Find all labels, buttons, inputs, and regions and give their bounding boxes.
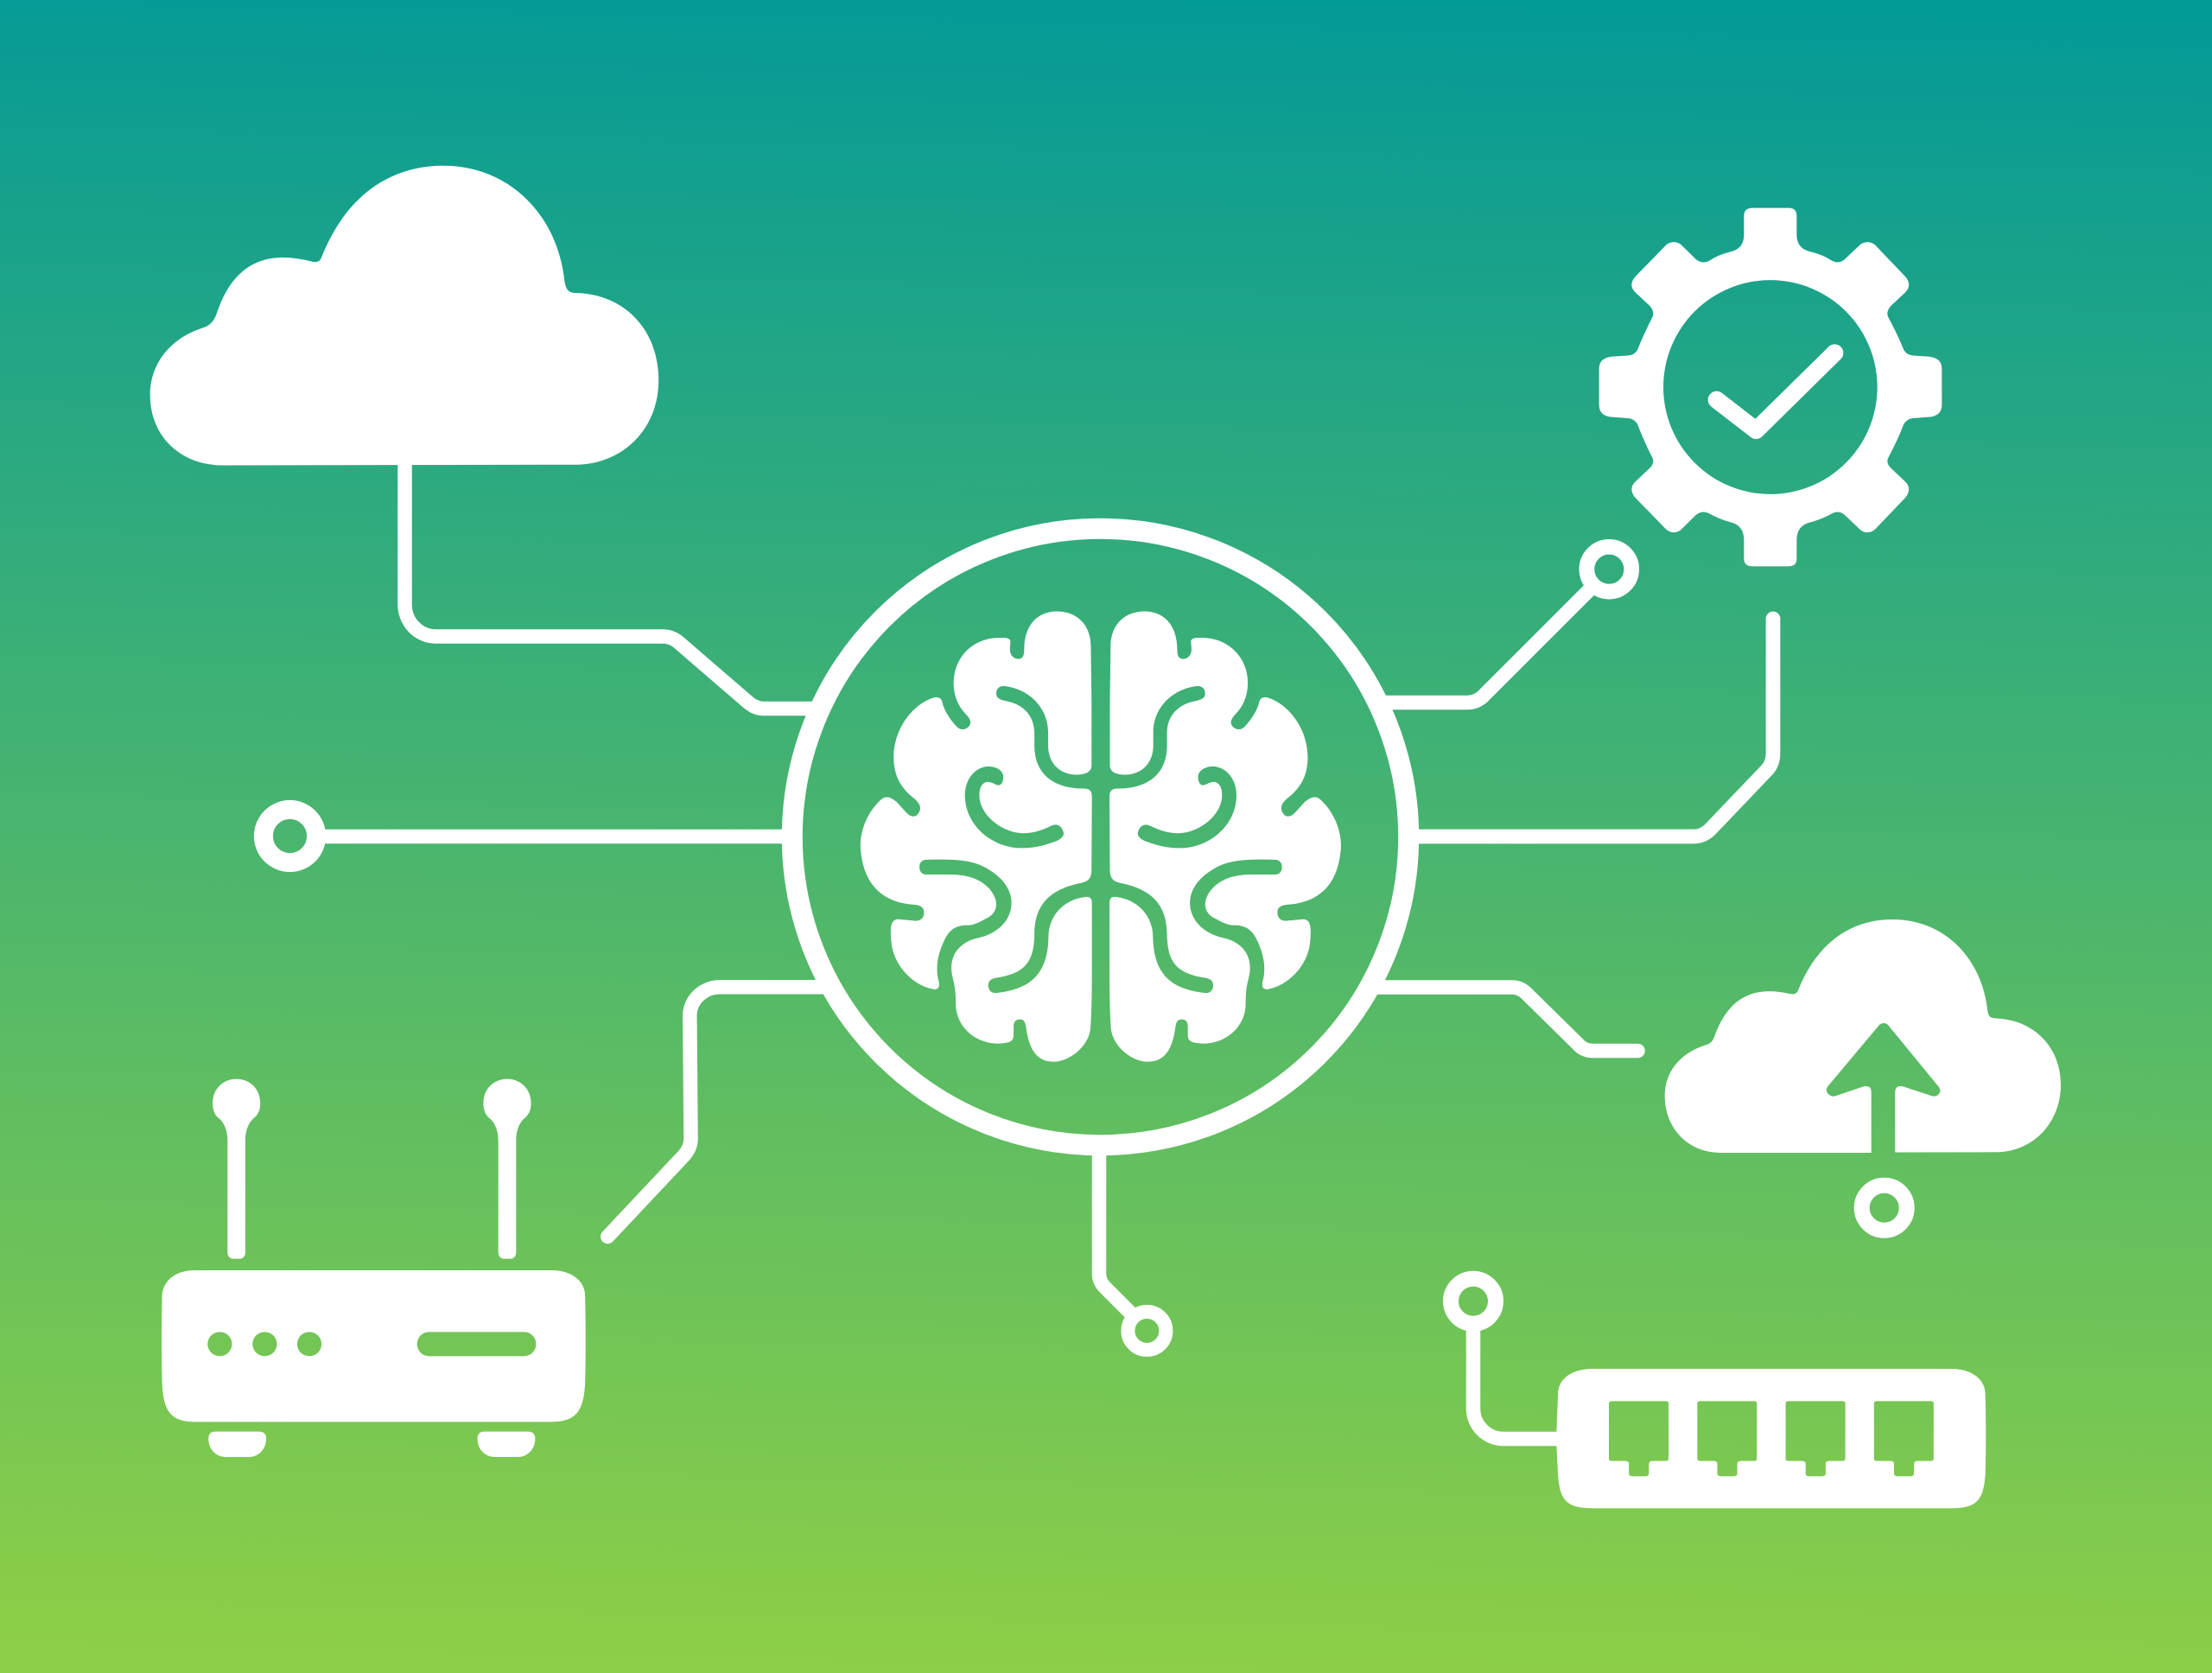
icon: router: [162, 1079, 586, 1457]
router right antenna: [483, 1079, 531, 1259]
connector: upper right node to ring: [1378, 547, 1631, 703]
switch body with ports: [1556, 1369, 1986, 1508]
router body with lights and slot: [162, 1270, 586, 1422]
upper right line: [1378, 588, 1592, 703]
connector: lower right line to ring: [1374, 987, 1638, 1051]
bottom node: [1128, 1312, 1166, 1350]
connector: bottom node to ring: [1099, 1145, 1166, 1350]
central ring: [792, 529, 1408, 1145]
connector: router to ring: [607, 987, 825, 1237]
left node: [264, 810, 316, 862]
connector: gear to ring: [1408, 619, 1773, 836]
router right foot: [478, 1432, 535, 1457]
brain left hemisphere: [861, 611, 1092, 1062]
brain right hemisphere: [1109, 611, 1341, 1062]
upload cloud node: [1862, 1186, 1907, 1231]
icon: network switch with connector: [1451, 1279, 1986, 1508]
router left foot: [208, 1432, 266, 1457]
connector: cloud to ring: [404, 462, 820, 709]
icon: upload cloud: [1665, 919, 2061, 1153]
bottom line: [1099, 1145, 1131, 1314]
check mark: [1717, 353, 1834, 430]
switch node: [1451, 1279, 1496, 1324]
gear: [1599, 208, 1942, 566]
upper right node: [1586, 547, 1631, 592]
icon: cloud: [150, 166, 658, 465]
connector: left node to ring: [264, 810, 792, 862]
router left antenna: [213, 1079, 260, 1259]
switch connector line: [1473, 1326, 1560, 1439]
icon: brain: [861, 611, 1341, 1062]
icon: gear with check mark: [1599, 208, 1942, 566]
left line: [320, 830, 792, 843]
